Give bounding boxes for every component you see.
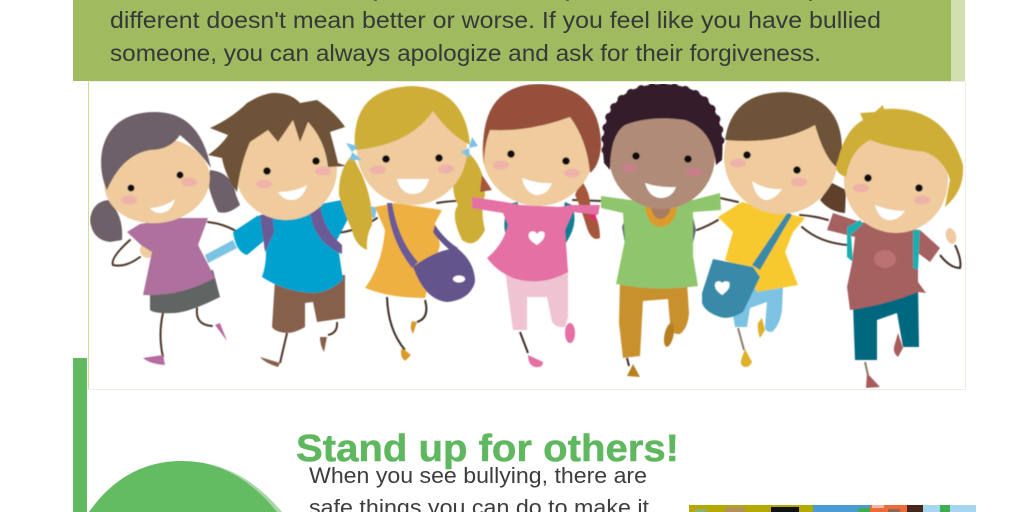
child 7: blond boy in maroon — [827, 105, 963, 388]
child 6: girl in yellow with blue bag — [702, 92, 846, 367]
text block: standing up for others — [309, 463, 649, 512]
panel: top advice banner — [73, 0, 965, 81]
text block: advice about apologizing: different doesn't mean better or worse. If you feel like you have bullied — [110, 7, 881, 33]
child 5: boy in green — [601, 84, 722, 377]
green circular shape — [89, 461, 282, 512]
heading: Stand up for others: Stand up for others! — [296, 428, 679, 470]
child 1: girl in purple — [90, 112, 240, 365]
child 2: boy in blue — [205, 93, 377, 367]
all children — [90, 84, 963, 388]
child 3: blonde girl with purple bag — [339, 86, 485, 361]
text block: standing up for others: When you see bullying, there are — [309, 463, 647, 488]
child 4: girl in pink — [472, 84, 601, 367]
left green accent bar — [73, 358, 87, 512]
illustration: seven children holding each other — [88, 82, 966, 390]
text block: advice about apologizing: someone, you can always apologize and ask for their forgiveness. — [110, 40, 821, 66]
text block: advice about apologizing — [110, 7, 881, 66]
arms linking the children — [208, 198, 848, 245]
photo strip: colourful picture cropped at page edge — [689, 505, 976, 512]
